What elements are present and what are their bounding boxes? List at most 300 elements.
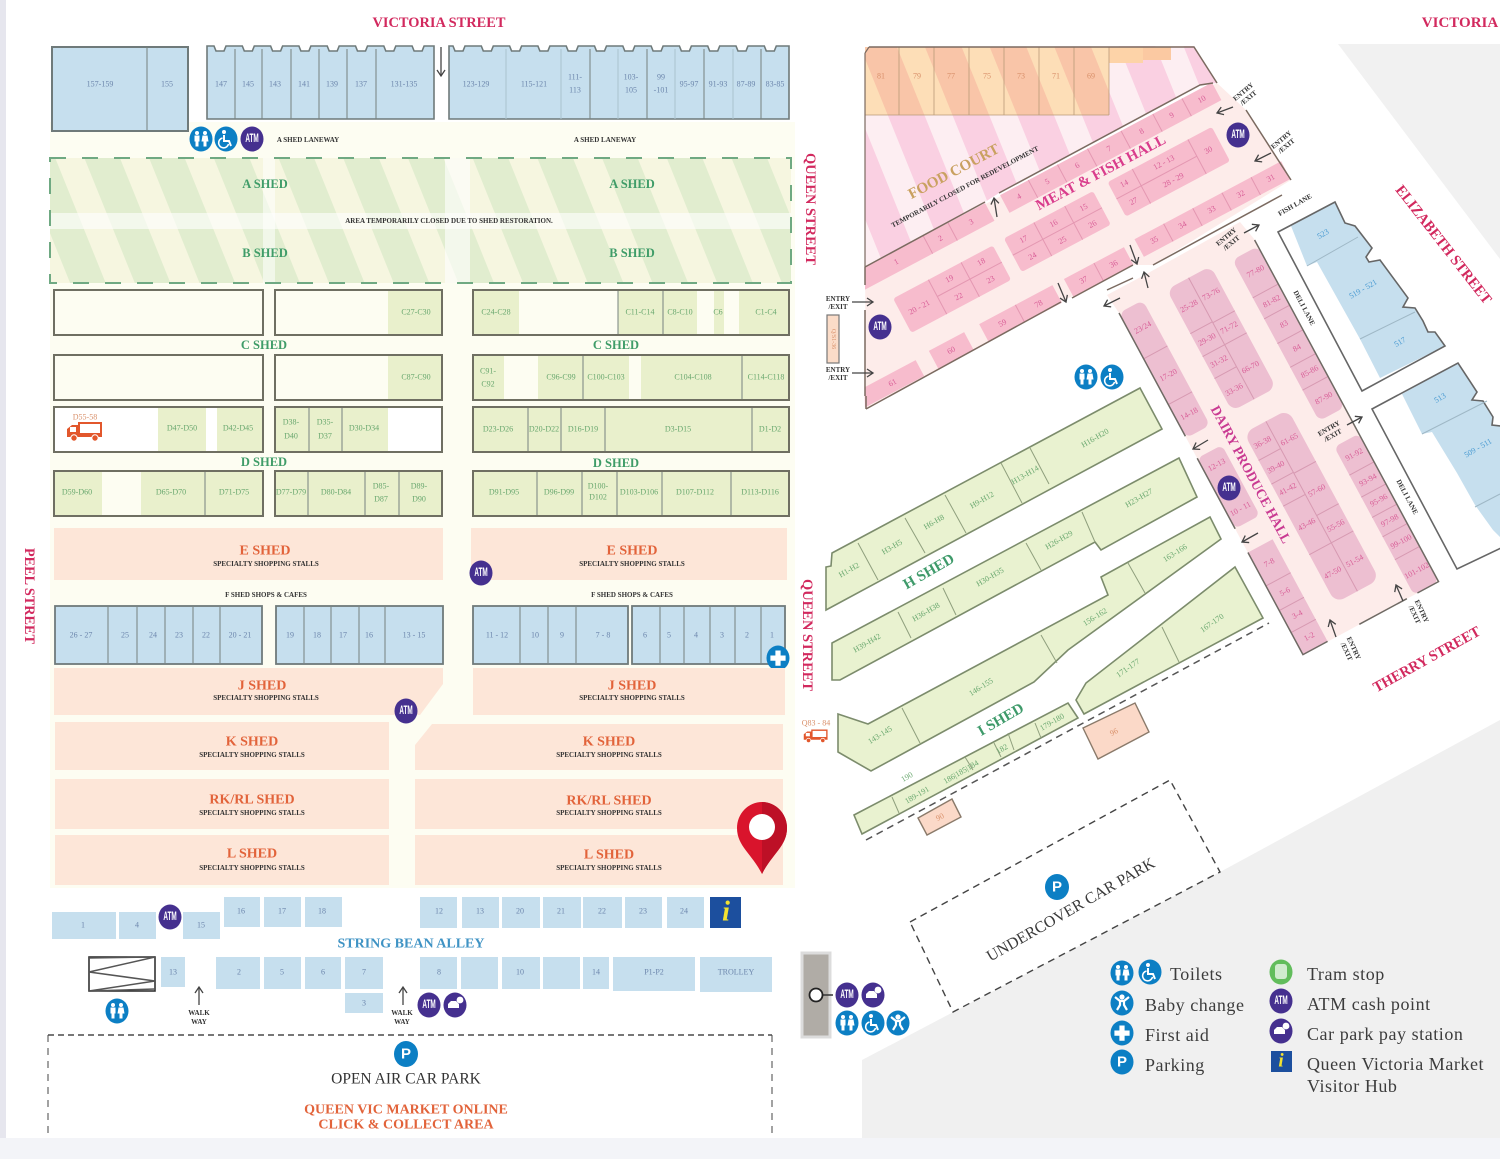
stalls 12-10: 10 - 11 — [1228, 500, 1252, 518]
stalls 15-26: 16 — [1048, 218, 1059, 229]
shops 26-20: 25 — [121, 630, 129, 640]
label: entry exit dairy south east: ENTRY — [1413, 599, 1430, 624]
shops 26-20: 26 - 27 — [70, 630, 92, 640]
stalls 12-30: 27 — [1128, 195, 1139, 207]
label: C shed right: C SHED — [593, 338, 639, 352]
stalls 12-30 — [1108, 127, 1230, 217]
row: D shed upper — [54, 407, 789, 452]
arrow: Victoria Street entry — [440, 47, 442, 76]
shops 147-131: 139 — [326, 80, 338, 88]
row: D shed upper: D30-D34 — [349, 424, 379, 432]
bottom page edge — [0, 1138, 1500, 1159]
panel: food court — [865, 46, 1217, 267]
label: food court: FOOD COURT — [906, 141, 1002, 203]
stalls 12-30: 14 — [1119, 178, 1130, 189]
panel: I shed upper: 156-162 — [1081, 606, 1109, 628]
label: entry exit north east: /EXIT — [1238, 89, 1259, 108]
icon: ATM tram: ATM — [840, 988, 854, 1002]
stalls 7-1: 3-4 — [1290, 608, 1304, 621]
label: B shed left: B SHED — [242, 246, 288, 260]
stalls 15-26: 24 — [1027, 250, 1038, 262]
icon: ATM meat hall west — [868, 314, 892, 340]
stalls 1-10: 1 — [892, 257, 900, 267]
shops 147-131: 137 — [355, 80, 367, 88]
stalls 35-31: 32 — [1235, 188, 1246, 200]
panel: RK/RL shed left: RK/RL SHED — [209, 792, 295, 808]
shops 11-7 — [473, 606, 628, 664]
food court stalls 81-69: 77 — [947, 72, 955, 80]
panel: L shed left — [55, 835, 389, 885]
row: D shed upper: D3-D15 — [665, 424, 691, 434]
legend: first aid — [1110, 1020, 1209, 1046]
icon: ATM J shed: ATM — [399, 704, 413, 718]
heading: String Bean Alley: STRING BEAN ALLEY — [337, 936, 485, 952]
label: entry exit north east — [1232, 81, 1260, 109]
label: entry exit dairy south east — [1406, 599, 1430, 627]
panel: L shed right — [415, 835, 783, 885]
row: D shed lower: D59-D60 — [62, 488, 92, 496]
stalls 20-23: 20 - 21 — [907, 298, 931, 317]
stalls 77-90: 87-90 — [1313, 390, 1334, 406]
icon: first aid F shed — [766, 646, 790, 670]
stalls 91-102: 97-98 — [1379, 512, 1400, 529]
shops 123-83: 123-129 — [463, 80, 489, 88]
stalls 1-10: 3 — [967, 217, 975, 227]
stalls 23-14 — [1119, 300, 1210, 438]
panel: String Bean Alley upper shops: 12 — [435, 906, 443, 916]
label: walk way left: WALK — [188, 1009, 210, 1017]
label: open air car park: OPEN AIR CAR PARK — [331, 1070, 482, 1088]
stalls 15-26: 15 — [1078, 202, 1089, 213]
shops 26-20: 24 — [149, 630, 157, 640]
stalls 25-70 — [1167, 266, 1276, 411]
stalls 20-23: 18 — [976, 256, 987, 268]
stalls 7-1: 1-2 — [1302, 630, 1316, 643]
box: stall 96: 96 — [1108, 726, 1120, 738]
panel: H shed north: H16-H20 — [1080, 427, 1110, 449]
panel: Elizabeth Street shops south — [1372, 363, 1500, 569]
panel: String Bean Alley lower shops: 8 — [437, 968, 441, 976]
shops 147-131: 141 — [298, 80, 310, 88]
shops 6-1 — [632, 606, 785, 664]
shops 26-20: 22 — [202, 630, 210, 640]
arrow: food court up — [994, 198, 997, 217]
legend: parking — [1110, 1050, 1205, 1075]
row: D shed upper: D35- — [317, 418, 334, 426]
arrow: entry south west — [852, 372, 873, 374]
icon: ATM E shed — [470, 560, 492, 586]
arrow: hall lane down west — [1058, 283, 1066, 302]
grey outside area bottom right — [862, 720, 1500, 1138]
label: F shed right: F SHED SHOPS & CAFES — [591, 591, 673, 599]
label: entry exit dairy north: /EXIT — [1221, 234, 1242, 253]
stalls 20-23: 22 — [953, 291, 964, 302]
label: click and collect — [304, 1102, 508, 1132]
panel: H shed south: H39-H42 — [852, 632, 882, 654]
legend: first aid: First aid — [1145, 1025, 1209, 1045]
panel: K shed right: K SHED — [583, 734, 635, 750]
panel: I shed east: 167-170 — [1198, 612, 1226, 634]
panel: E shed right: SPECIALTY SHOPPING STALLS — [579, 560, 685, 568]
stalls 77-90: 85-86 — [1299, 363, 1320, 380]
label: walk way right: WALK — [391, 1009, 413, 1017]
panel: legend — [1110, 960, 1484, 1096]
stalls 36-61: 47-50 — [1322, 564, 1343, 581]
panel: String Bean Alley upper shops — [52, 897, 704, 939]
icon: visitor hub — [710, 896, 741, 928]
label: F shed left: F SHED SHOPS & CAFES — [225, 591, 307, 599]
row: D shed lower — [54, 471, 789, 516]
label: walk way left — [188, 1009, 210, 1026]
shops 157-155: 155 — [161, 80, 173, 88]
label: deli lane south: DELI LANE — [1394, 478, 1420, 516]
row: D shed lower: D102 — [589, 492, 607, 502]
stalls 61 60 59 78: 78 — [1033, 298, 1044, 310]
cream market ground — [50, 122, 795, 888]
stalls 25-70: 31-32 — [1209, 353, 1229, 370]
legend: parking: P — [1117, 1054, 1127, 1070]
label: entry exit north west: ENTRY — [826, 295, 850, 303]
panel: I shed strip: 182 — [995, 742, 1009, 756]
label: click and collect: CLICK & COLLECT AREA — [318, 1118, 494, 1132]
legend: car park pay station — [1270, 1018, 1463, 1044]
shops 26-20: 20 - 21 — [229, 630, 251, 640]
panel: H shed north: H9-H12 — [968, 490, 996, 510]
row: C shed lower: C87-C90 — [401, 372, 431, 382]
panel: String Bean Alley upper shops: 4 — [135, 920, 139, 930]
label: entry exit dairy south: ENTRY — [1345, 636, 1362, 661]
label: walk way right: WAY — [394, 1018, 410, 1026]
arrow: walk way left — [198, 987, 200, 1005]
shops 123-83: 83-85 — [766, 80, 784, 88]
row: C shed upper: C27-C30 — [401, 308, 431, 316]
icon: ATM String Bean Alley — [158, 904, 182, 930]
panel: Meat and Fish Hall ground — [865, 83, 1291, 409]
icon: ATM E shed: ATM — [474, 566, 488, 580]
shops 11-7: 11 - 12 — [486, 630, 508, 640]
stalls 91-102: 91-92 — [1344, 446, 1365, 463]
stalls 12-10 — [1197, 445, 1260, 529]
stalls 91-102: 95-96 — [1368, 492, 1389, 509]
row: D shed lower: D77-D79 — [276, 488, 306, 496]
stalls 37 36: 36 — [1108, 258, 1119, 270]
stalls 36-61: 39-40 — [1265, 459, 1286, 475]
box: small stall at hall entry — [827, 315, 839, 363]
label: undercover car park: UNDERCOVER CAR PARK — [984, 855, 1159, 965]
panel: String Bean Alley upper shops: 22 — [598, 906, 606, 916]
street label: Peel Street: PEEL STREET — [21, 548, 37, 644]
panel: J shed left — [54, 668, 443, 715]
panel: J shed left: SPECIALTY SHOPPING STALLS — [213, 694, 319, 702]
legend: ATM cash point: ATM cash point — [1307, 994, 1431, 1014]
icon: pay station tram — [862, 982, 884, 1008]
stalls 25-70: 29-30 — [1197, 331, 1217, 348]
panel: tram stop — [802, 953, 910, 1037]
row: C shed lower: C104-C108 — [674, 372, 712, 382]
icon: ATM A shed: ATM — [245, 132, 259, 146]
panel: H shed south: H30-H35 — [975, 566, 1005, 588]
icon: ATM walk way — [418, 992, 440, 1018]
icon: delivery truck D shed — [67, 422, 102, 441]
panel: L shed left: SPECIALTY SHOPPING STALLS — [199, 864, 305, 872]
grey outside area top right — [1338, 44, 1500, 259]
row: D shed lower: D65-D70 — [156, 488, 186, 496]
panel: F shed shops — [55, 606, 785, 664]
stalls 36-61: 61-65 — [1279, 431, 1300, 448]
arrow: entry dairy east — [1347, 417, 1362, 425]
stalls 25-70: 66-70 — [1240, 359, 1261, 376]
label: entry exit south west — [826, 366, 850, 382]
label: entry exit dairy east: ENTRY — [1316, 419, 1342, 438]
stalls 20-23: 23 — [985, 274, 996, 285]
panel: D shed — [54, 407, 789, 516]
shops 19-13 — [276, 606, 443, 664]
stalls 25-70: 73-76 — [1201, 286, 1221, 302]
panel: I shed strip: 179-180 — [1038, 711, 1066, 733]
label: entry exit east: /EXIT — [1276, 137, 1297, 156]
row: D shed upper: D47-D50 — [167, 424, 197, 432]
panel: String Bean Alley lower shops: 10 — [516, 968, 524, 976]
row: D shed upper: D40 — [284, 432, 298, 440]
panel: E shed left — [54, 528, 443, 580]
panel: I shed east: 171-177 — [1114, 657, 1142, 679]
stalls 1-10: 6 — [1073, 161, 1081, 170]
legend: baby change: Baby change — [1145, 995, 1245, 1015]
panel: Elizabeth Street shops north — [1278, 202, 1445, 391]
panel: String Bean Alley lower shops: 14 — [592, 968, 600, 976]
row: D shed lower: D107-D112 — [676, 488, 714, 496]
icon: toilets tram — [836, 1010, 858, 1036]
panel: String Bean Alley lower shops: 13 — [169, 968, 177, 976]
label: entry exit dairy east: /EXIT — [1322, 427, 1344, 444]
shops 123-83: 87-89 — [737, 80, 755, 88]
row: D shed upper: D42-D45 — [223, 424, 253, 432]
label: walk way left: WAY — [191, 1018, 207, 1026]
stalls 25-70: 71-72 — [1219, 319, 1239, 336]
arrow: entry dairy south — [1330, 620, 1336, 637]
stalls 20-23 — [893, 245, 1011, 333]
panel: H shed north: H13-H14 — [1010, 464, 1040, 486]
icon: accessible toilet tram — [862, 1010, 884, 1036]
row: C shed lower: C100-C103 — [587, 372, 625, 382]
hall walls — [865, 83, 1291, 409]
icon: visitor hub: i — [722, 896, 730, 928]
row: C shed lower: C91- — [480, 366, 496, 376]
icon: delivery truck Q83 — [804, 730, 828, 743]
arrow: entry dairy south east — [1396, 585, 1403, 601]
label: entry exit dairy south east: /EXIT — [1406, 603, 1422, 625]
stalls 36-61: 41-42 — [1277, 481, 1298, 497]
legend: visitor hub: Visitor Hub — [1307, 1076, 1397, 1096]
panel: Elizabeth Street shops south: 513 — [1433, 391, 1447, 405]
stalls 1-10: 5 — [1043, 177, 1051, 186]
arrow: entry dairy north — [1244, 225, 1259, 233]
label: entry exit south west: ENTRY — [826, 366, 850, 374]
legend: baby change — [1110, 990, 1245, 1016]
stalls 77-90 — [1232, 246, 1345, 421]
label: entry exit east: ENTRY — [1270, 129, 1293, 151]
label: fish lane: FISH LANE — [1277, 192, 1314, 218]
stalls 91-102 — [1334, 434, 1439, 595]
row: C shed upper: C6 — [713, 308, 723, 316]
stalls 7-1: 7-8 — [1262, 556, 1276, 569]
panel: I shed strip: 186|185|184 — [942, 758, 980, 786]
stalls 61 60 59 78: 61 — [887, 377, 898, 388]
shops 123-83: 91-93 — [709, 80, 727, 88]
label: D shed left: D SHED — [241, 455, 287, 469]
street label: Victoria cut off: VICTORIA — [1422, 15, 1498, 31]
stalls 35-31: 31 — [1265, 172, 1276, 184]
icon: ATM String Bean Alley: ATM — [163, 910, 177, 924]
panel: RK/RL shed right — [415, 779, 783, 829]
box: small stall at hall entry: Q/S1-36 — [830, 329, 836, 349]
label: C shed left: C SHED — [241, 338, 287, 352]
panel: String Bean Alley lower shops: 7 — [362, 968, 366, 976]
shops 26-20: 23 — [175, 630, 183, 640]
label: entry exit south west: /EXIT — [827, 374, 848, 382]
row: D shed upper: D20-D22 — [529, 424, 559, 434]
food court stalls 81-69: 75 — [983, 72, 991, 80]
legend: ATM cash point — [1270, 988, 1431, 1014]
panel: H shed south: H36-H38 — [911, 601, 941, 623]
row: D shed lower: D80-D84 — [321, 488, 351, 496]
stalls 15-26: 26 — [1087, 218, 1098, 230]
panel: J shed right — [473, 668, 785, 715]
label: A shed left: A SHED — [242, 177, 288, 191]
label: Q83-84: Q83 - 84 — [802, 718, 830, 728]
panel: RK/RL shed left: SPECIALTY SHOPPING STALLS — [199, 809, 305, 817]
panel: H shed north: H1-H2 — [837, 561, 861, 579]
panel: H shed north: H6-H8 — [922, 513, 946, 531]
shops 19-13: 13 - 15 — [403, 630, 425, 640]
icon: parking — [394, 1041, 418, 1067]
food court stalls 81-69 — [865, 47, 1171, 115]
row: D shed lower: D96-D99 — [544, 488, 574, 496]
panel: E shed right — [471, 528, 787, 580]
arrow: walk way right — [402, 987, 404, 1005]
row: C shed lower: C92 — [481, 380, 495, 388]
panel: K shed left: K SHED — [226, 734, 278, 750]
stalls 91-102: 93-94 — [1358, 472, 1378, 488]
panel: A and B sheds closed area — [50, 158, 791, 283]
arrow: dairy west upper — [1193, 440, 1208, 449]
shops 6-1: 3 — [720, 630, 724, 640]
shops 11-7: 9 — [560, 630, 564, 640]
row: D shed lower: D85- — [373, 482, 390, 490]
shops 123-83: -101 — [654, 86, 668, 94]
panel: RK/RL shed right: RK/RL SHED — [566, 794, 652, 808]
panel: I shed east — [1076, 567, 1263, 714]
row: D shed lower: D100- — [588, 482, 609, 490]
shops 123-83: 99 — [657, 72, 665, 82]
label: entry exit north west — [826, 295, 850, 311]
label: A shed right: A SHED — [609, 177, 655, 191]
label: entry exit east — [1270, 129, 1298, 157]
panel: String Bean Alley lower shops: 5 — [280, 968, 284, 976]
label: walk way right — [391, 1009, 413, 1026]
icon: ATM meat hall east — [1226, 122, 1250, 148]
food court stalls 81-69: 79 — [913, 72, 921, 80]
arrow: entry north east — [1217, 107, 1233, 113]
stalls 36-61: 36-38 — [1252, 434, 1273, 451]
panel: L shed right: L SHED — [584, 848, 634, 862]
row: D shed lower: D113-D116 — [741, 488, 779, 496]
panel: I shed strip — [854, 703, 1078, 834]
icon: ATM dairy hall — [1218, 476, 1240, 500]
stalls 25-70: 33-36 — [1224, 381, 1244, 398]
food court stalls 81-69: 71 — [1052, 72, 1060, 80]
stalls 1-10: 10 — [1196, 93, 1207, 105]
panel: String Bean Alley upper shops: 20 — [516, 906, 524, 916]
legend: car park pay station: Car park pay station — [1307, 1024, 1463, 1044]
stalls 77-90: 84 — [1291, 342, 1302, 354]
stalls 91-102: 101-102 — [1403, 560, 1431, 581]
shops 6-1: 1 — [770, 630, 774, 640]
icon: parking undercover: P — [1052, 878, 1062, 896]
label: D shed right: D SHED — [593, 456, 639, 470]
stalls 12-30: 12 - 13 — [1152, 153, 1176, 172]
panel: RK/RL shed right: SPECIALTY SHOPPING STALLS — [556, 809, 662, 817]
label: entry exit dairy south: /EXIT — [1338, 640, 1354, 662]
panel: String Bean Alley upper shops: 16 — [237, 906, 245, 916]
row: C shed lower: C96-C99 — [546, 372, 576, 382]
panel: E shed left: SPECIALTY SHOPPING STALLS — [213, 560, 319, 568]
shops 19-13: 16 — [365, 630, 373, 640]
stalls 12-10: 12-13 — [1206, 456, 1227, 473]
panel: Meat and Fish Hall stalls — [807, 71, 1291, 407]
panel: String Bean Alley upper shops: 21 — [557, 906, 565, 916]
row: D shed lower: D103-D106 — [620, 488, 658, 496]
shops 11-7: 10 — [531, 630, 539, 640]
stalls 23-14: 14-18 — [1179, 405, 1200, 422]
stalls 37 36: 37 — [1078, 274, 1089, 286]
legend: tram stop: Tram stop — [1307, 964, 1385, 984]
stalls 1-10: 4 — [1015, 192, 1023, 201]
dashed boundary line — [866, 623, 1269, 840]
row: D shed lower: D91-D95 — [489, 488, 519, 496]
arrow: entry north west — [852, 301, 873, 303]
panel: String Bean Alley upper shops: 1 — [81, 920, 85, 930]
panel: J shed left: J SHED — [238, 678, 286, 694]
icon: accessible toilet A shed — [214, 126, 238, 152]
label: entry exit dairy south — [1338, 636, 1362, 664]
left page edge — [0, 0, 6, 1159]
stalls 1-10: 7 — [1105, 144, 1113, 154]
label: A shed laneway right: A SHED LANEWAY — [574, 136, 636, 144]
label: entry exit dairy east — [1316, 419, 1346, 445]
stalls 36-61: 51-54 — [1344, 553, 1365, 569]
stalls 36-61: 57-60 — [1306, 482, 1327, 499]
icon: ATM walk way: ATM — [422, 998, 436, 1012]
stalls 61 60 59 78: 60 — [946, 344, 957, 356]
panel: H shed south: H23-H27 — [1124, 487, 1154, 509]
food court stalls 81-69: 69 — [1087, 72, 1095, 80]
icon: toilets A shed — [190, 126, 212, 152]
row: D shed upper: D55-58 — [73, 412, 97, 422]
panel: String Bean Alley lower shops: 3 — [362, 998, 366, 1008]
shops 123-83: 115-121 — [521, 80, 547, 88]
arrow: dairy lane left — [1104, 298, 1120, 306]
panel: String Bean Alley lower shops — [161, 957, 772, 1013]
shops 123-83: 113 — [569, 86, 581, 94]
panel: K shed right: SPECIALTY SHOPPING STALLS — [556, 751, 662, 759]
notice: closed for restoration: AREA TEMPORARILY CLOSED DUE TO SHED RESTORATION. — [345, 217, 553, 225]
panel: String Bean Alley upper shops: 24 — [680, 906, 688, 916]
stalls 7-1 — [1248, 539, 1328, 655]
stalls 77-90: 81-82 — [1261, 293, 1282, 310]
icon: baby change tram — [886, 1010, 910, 1036]
panel: undercover car park — [910, 780, 1220, 1012]
